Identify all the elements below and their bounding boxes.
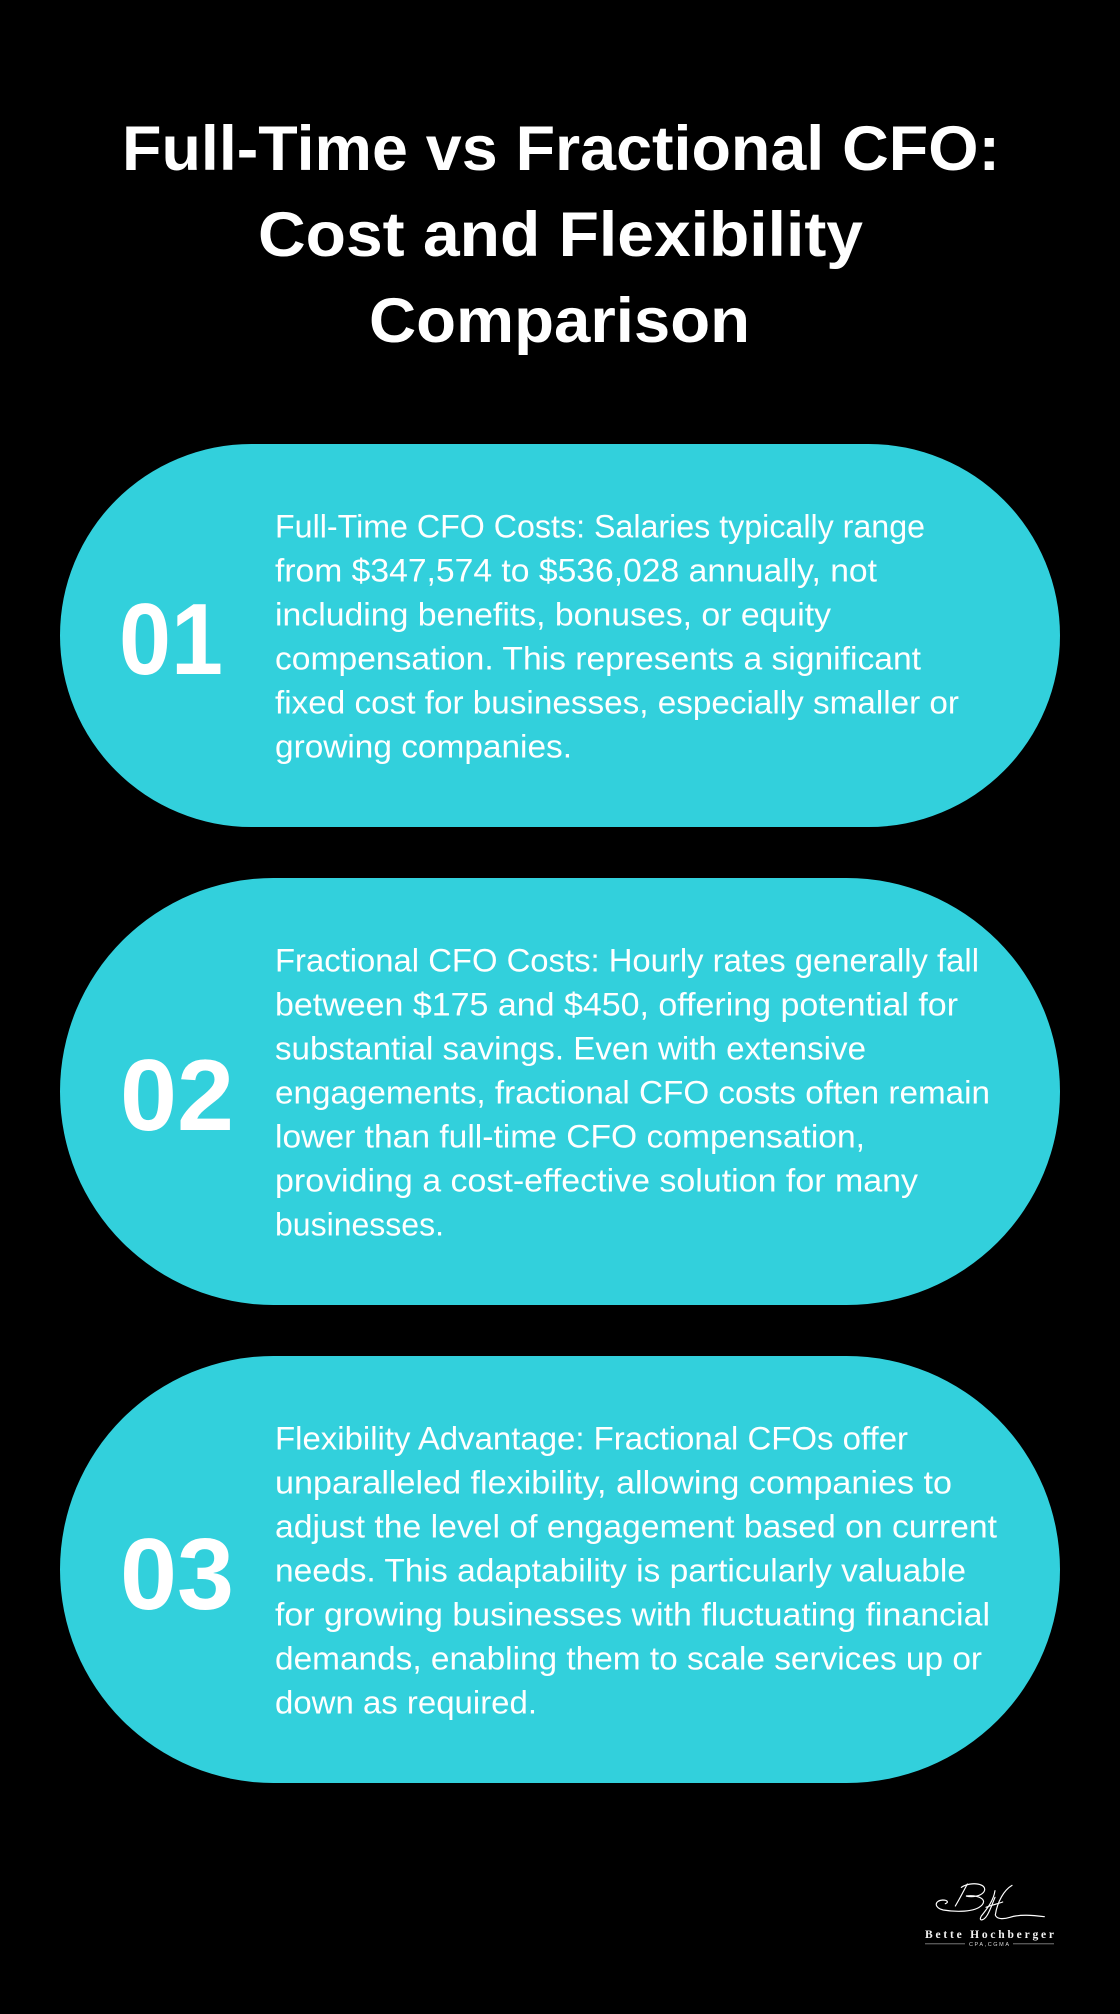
title — [122, 114, 1000, 356]
text: full-time CFO costs: including benefits, bonuses, or equity — [275, 596, 831, 632]
icon: signature monogram — [936, 1884, 1044, 1920]
panel: fractional CFO costs — [60, 878, 1060, 1305]
text: name: Bette Hochberger — [925, 1929, 1054, 1941]
text: full-time CFO costs: fixed cost for businesses, especially smaller or — [275, 684, 959, 720]
text: fractional CFO costs: engagements, fractional CFO costs often remain — [275, 1074, 990, 1110]
text: fractional CFO costs: Fractional CFO Costs: Hourly rates generally fall — [275, 942, 979, 978]
text: flexibility advantage: for growing businesses with fluctuating financial — [275, 1596, 990, 1632]
text: fractional CFO costs: lower than full-time CFO compensation, — [275, 1118, 865, 1154]
text: fractional CFO costs — [275, 942, 990, 1242]
title: Cost and Flexibility — [258, 200, 863, 270]
title: Comparison — [369, 286, 750, 356]
text: credentials: CPA,CGMA — [969, 1942, 1009, 1948]
number 02: 02 — [120, 1040, 234, 1152]
text: full-time CFO costs: from $347,574 to $536,028 annually, not — [275, 552, 877, 588]
divider left — [925, 1942, 965, 1945]
text: fractional CFO costs: providing a cost-effective solution for many — [275, 1162, 918, 1198]
text: flexibility advantage: Flexibility Advantage: Fractional CFOs offer — [275, 1420, 908, 1456]
text: flexibility advantage: needs. This adaptability is particularly valuable — [275, 1552, 966, 1588]
text: full-time CFO costs — [275, 508, 959, 764]
text: flexibility advantage: unparalleled flexibility, allowing companies to — [275, 1464, 952, 1500]
text: full-time CFO costs: growing companies. — [275, 728, 572, 764]
text: fractional CFO costs: businesses. — [275, 1206, 444, 1242]
text: fractional CFO costs: between $175 and $450, offering potential for — [275, 986, 958, 1022]
text: flexibility advantage: demands, enabling them to scale services up or — [275, 1640, 982, 1676]
panel: full-time CFO costs — [60, 444, 1060, 827]
number 03: 03 — [120, 1519, 234, 1631]
text: flexibility advantage: down as required. — [275, 1684, 537, 1720]
text: fractional CFO costs: substantial savings. Even with extensive — [275, 1030, 866, 1066]
text: full-time CFO costs: Full-Time CFO Costs: Salaries typically range — [275, 508, 925, 544]
text: flexibility advantage — [275, 1420, 997, 1720]
logo: Bette Hochberger signature — [925, 1884, 1054, 1948]
divider right — [1013, 1942, 1054, 1945]
title: Full-Time vs Fractional CFO: — [122, 114, 1000, 184]
number 01: 01 — [119, 584, 223, 696]
text: full-time CFO costs: compensation. This represents a significant — [275, 640, 921, 676]
text: flexibility advantage: adjust the level of engagement based on current — [275, 1508, 997, 1544]
panel: flexibility advantage — [60, 1356, 1060, 1783]
